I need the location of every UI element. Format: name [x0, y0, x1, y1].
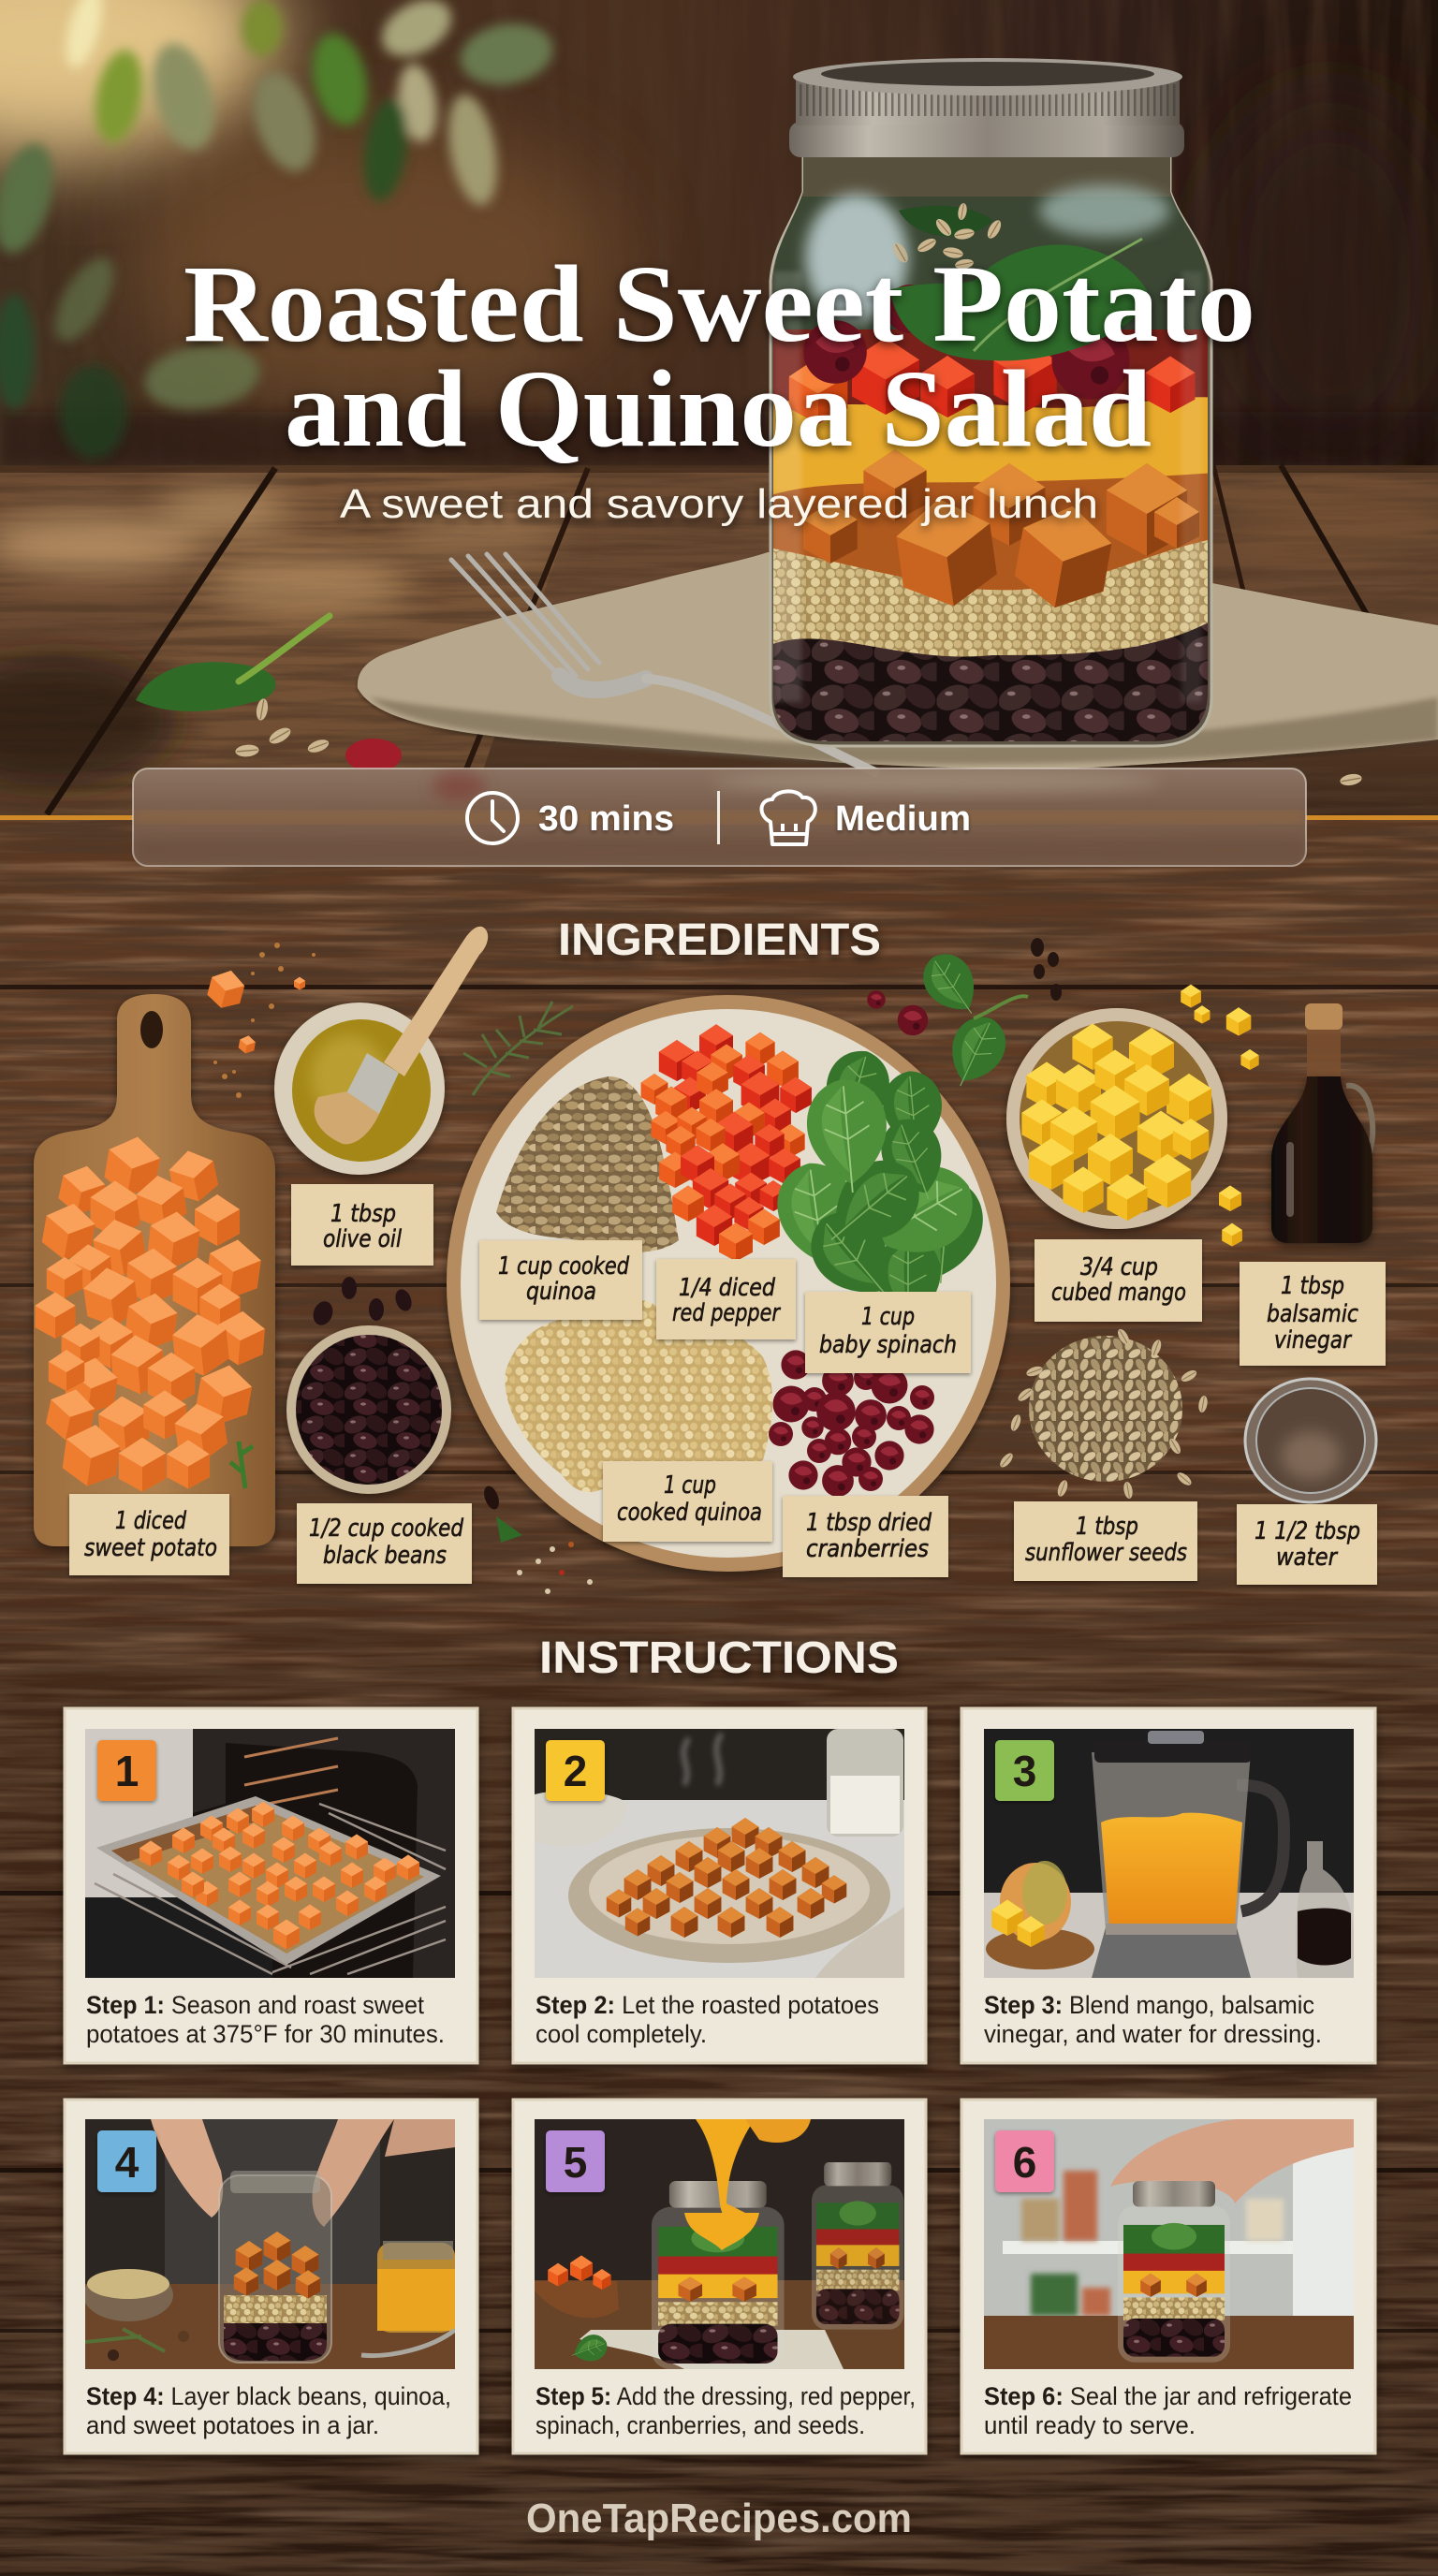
hero photo: jar on rustic table [0, 0, 1438, 819]
label: red pepper: red pepper [672, 1299, 782, 1327]
label: cooked quinoa (bottom): cooked quinoa [617, 1499, 762, 1527]
balsamic vinegar bottle [1271, 1003, 1372, 1243]
hero wall backdrop [0, 0, 1438, 468]
hero table planks [0, 465, 1438, 819]
label: olive oil: olive oil [323, 1225, 403, 1253]
label: olive oil: 1 tbsp [330, 1200, 396, 1228]
label: sweet potato: 1 diced [115, 1507, 186, 1535]
step 2 text: Step 2: Let the roasted potatoes [536, 1991, 879, 2019]
step number 5: 5 [564, 2138, 587, 2187]
step number 3: 3 [1013, 1747, 1036, 1795]
napkin shading [370, 697, 1438, 764]
step 1 text: Step 1: Season and roast sweet [86, 1991, 424, 2019]
label: dried cranberries [783, 1496, 948, 1577]
label: cooked quinoa (top) [479, 1240, 642, 1320]
mango bowl [1006, 1008, 1227, 1229]
panel: step 3 card [961, 1708, 1375, 2063]
step number 4: 4 [115, 2138, 139, 2187]
label: baby spinach: baby spinach [819, 1331, 957, 1359]
label: olive oil [291, 1184, 433, 1266]
napkin [358, 552, 1438, 768]
heading: instructions: INSTRUCTIONS [539, 1633, 899, 1683]
step number 6: 6 [1013, 2138, 1036, 2187]
blurred leaves [0, 0, 558, 459]
label: sunflower seeds [1014, 1501, 1197, 1581]
spinach leaf on table [136, 616, 330, 711]
title: Roasted Sweet Potato [183, 242, 1255, 365]
step number 2: 2 [564, 1747, 587, 1795]
black beans bowl [286, 1277, 451, 1494]
label: cubed mango [1034, 1239, 1202, 1322]
step 5 text: spinach, cranberries, and seeds. [536, 2411, 865, 2439]
fork [451, 554, 875, 772]
step 3 text: Step 3: Blend mango, balsamic [984, 1991, 1314, 2019]
step 2 photo: cooling plate [535, 1729, 904, 1978]
step 4 text: and sweet potatoes in a jar. [86, 2411, 379, 2439]
step 2 text: cool completely. [536, 2020, 707, 2048]
panel: step 6 card [961, 2100, 1375, 2453]
heading: ingredients: INGREDIENTS [558, 915, 881, 965]
step 1 text: potatoes at 375°F for 30 minutes. [86, 2020, 445, 2048]
label: cubed mango: 3/4 cup [1080, 1253, 1158, 1281]
label: sweet potato: sweet potato [84, 1534, 217, 1562]
step number 1: 1 [115, 1747, 139, 1795]
background: wood table lower section [0, 819, 1438, 2576]
difficulty: Medium [835, 799, 971, 839]
panel: ingredients spread [34, 927, 1386, 1594]
label: red pepper: 1/4 diced [679, 1274, 775, 1302]
plate [447, 995, 1010, 1572]
panel: step 4 card [65, 2100, 477, 2453]
label: balsamic vinegar: vinegar [1274, 1326, 1353, 1354]
panel: step 5 card [513, 2100, 926, 2453]
red pepper pile [641, 1024, 812, 1262]
step 6 text: Step 6: Seal the jar and refrigerate [984, 2382, 1352, 2410]
panel: step 1 card [65, 1708, 477, 2063]
herb and spice sprinkles [481, 1484, 593, 1594]
label: cooked quinoa (bottom): 1 cup [664, 1471, 716, 1500]
step 6 text: until ready to serve. [984, 2411, 1196, 2439]
label: black beans [297, 1503, 472, 1584]
step number 6 [995, 2130, 1054, 2192]
orange divider line [0, 815, 1438, 820]
label: sunflower seeds: sunflower seeds [1025, 1539, 1187, 1567]
scattered orange bits and crumbs [205, 943, 315, 1098]
panel: step 2 card [513, 1708, 926, 2063]
step 6 text [984, 2382, 1352, 2439]
step number 5 [546, 2130, 605, 2192]
step 5 photo: pouring dressing [535, 2119, 904, 2369]
label: cooked quinoa (top): quinoa [526, 1278, 596, 1306]
label: balsamic vinegar [1240, 1262, 1386, 1366]
label: sunflower seeds: 1 tbsp [1076, 1513, 1138, 1541]
jar lid [789, 58, 1184, 157]
label: water [1237, 1504, 1377, 1585]
step number 4 [97, 2130, 156, 2192]
title: and Quinoa Salad [285, 347, 1152, 470]
rosemary sprig [463, 1002, 573, 1095]
water glass [1245, 1379, 1376, 1502]
label: baby spinach: 1 cup [861, 1303, 915, 1331]
step 1 text [86, 1991, 445, 2048]
label: cooked quinoa (top): 1 cup cooked [498, 1252, 629, 1281]
white quinoa heap [505, 1299, 772, 1492]
step 4 text [86, 2382, 451, 2439]
spinach leaves and cranberries above plate [867, 938, 1062, 1097]
label: water: water [1276, 1544, 1339, 1572]
icon: clock [467, 793, 518, 843]
scattered mango pieces [1181, 985, 1259, 1247]
cutting board with sweet potato [34, 994, 275, 1546]
blurred reflections in bar [133, 770, 1306, 866]
olive oil bowl with brush [274, 927, 488, 1175]
step 2 text [536, 1991, 879, 2048]
divider [717, 791, 720, 844]
step 5 text [536, 2382, 916, 2439]
icon: chef hat [761, 791, 815, 844]
step 3 text [984, 1991, 1322, 2048]
step number 3 [995, 1740, 1054, 1801]
label: black beans: black beans [323, 1542, 447, 1570]
label: red pepper [656, 1259, 796, 1339]
step 5 text: Step 5: Add the dressing, red pepper, [536, 2382, 916, 2410]
step 3 text: vinegar, and water for dressing. [984, 2020, 1322, 2048]
step 4 text: Step 4: Layer black beans, quinoa, [86, 2382, 451, 2410]
label: water: 1 1/2 tbsp [1255, 1517, 1360, 1545]
mason jar [768, 58, 1217, 749]
label: cooked quinoa (bottom) [603, 1461, 772, 1542]
step 6 photo: sealing jar [984, 2119, 1354, 2369]
label: black beans: 1/2 cup cooked [309, 1515, 463, 1543]
label: dried cranberries: 1 tbsp dried [806, 1509, 932, 1537]
info bar [133, 768, 1306, 866]
jar glass body [770, 157, 1211, 746]
label: balsamic vinegar: balsamic [1267, 1300, 1358, 1328]
subtitle: A sweet and savory layered jar lunch [340, 481, 1098, 527]
seeds and cranberry on table [235, 697, 1363, 787]
time: 30 mins [538, 799, 674, 839]
label: sweet potato [69, 1494, 229, 1575]
sunflower seeds pile [998, 1327, 1209, 1500]
step 1 photo: oven tray [85, 1729, 455, 1978]
label: cubed mango: cubed mango [1051, 1279, 1186, 1307]
step 4 photo: layering jar [85, 2119, 455, 2369]
label: balsamic vinegar: 1 tbsp [1281, 1272, 1344, 1300]
footer brand: OneTapRecipes.com [526, 2496, 912, 2541]
brown quinoa heap [496, 1076, 679, 1252]
label: baby spinach [805, 1292, 971, 1373]
step number 1 [97, 1740, 156, 1801]
jar layered contents [768, 154, 1217, 749]
spinach pile [771, 1044, 989, 1328]
label: dried cranberries: cranberries [806, 1535, 929, 1563]
step 3 photo: blender [984, 1729, 1354, 1978]
step number 2 [546, 1740, 605, 1801]
title [183, 242, 1255, 470]
cranberries pile [769, 1350, 934, 1497]
